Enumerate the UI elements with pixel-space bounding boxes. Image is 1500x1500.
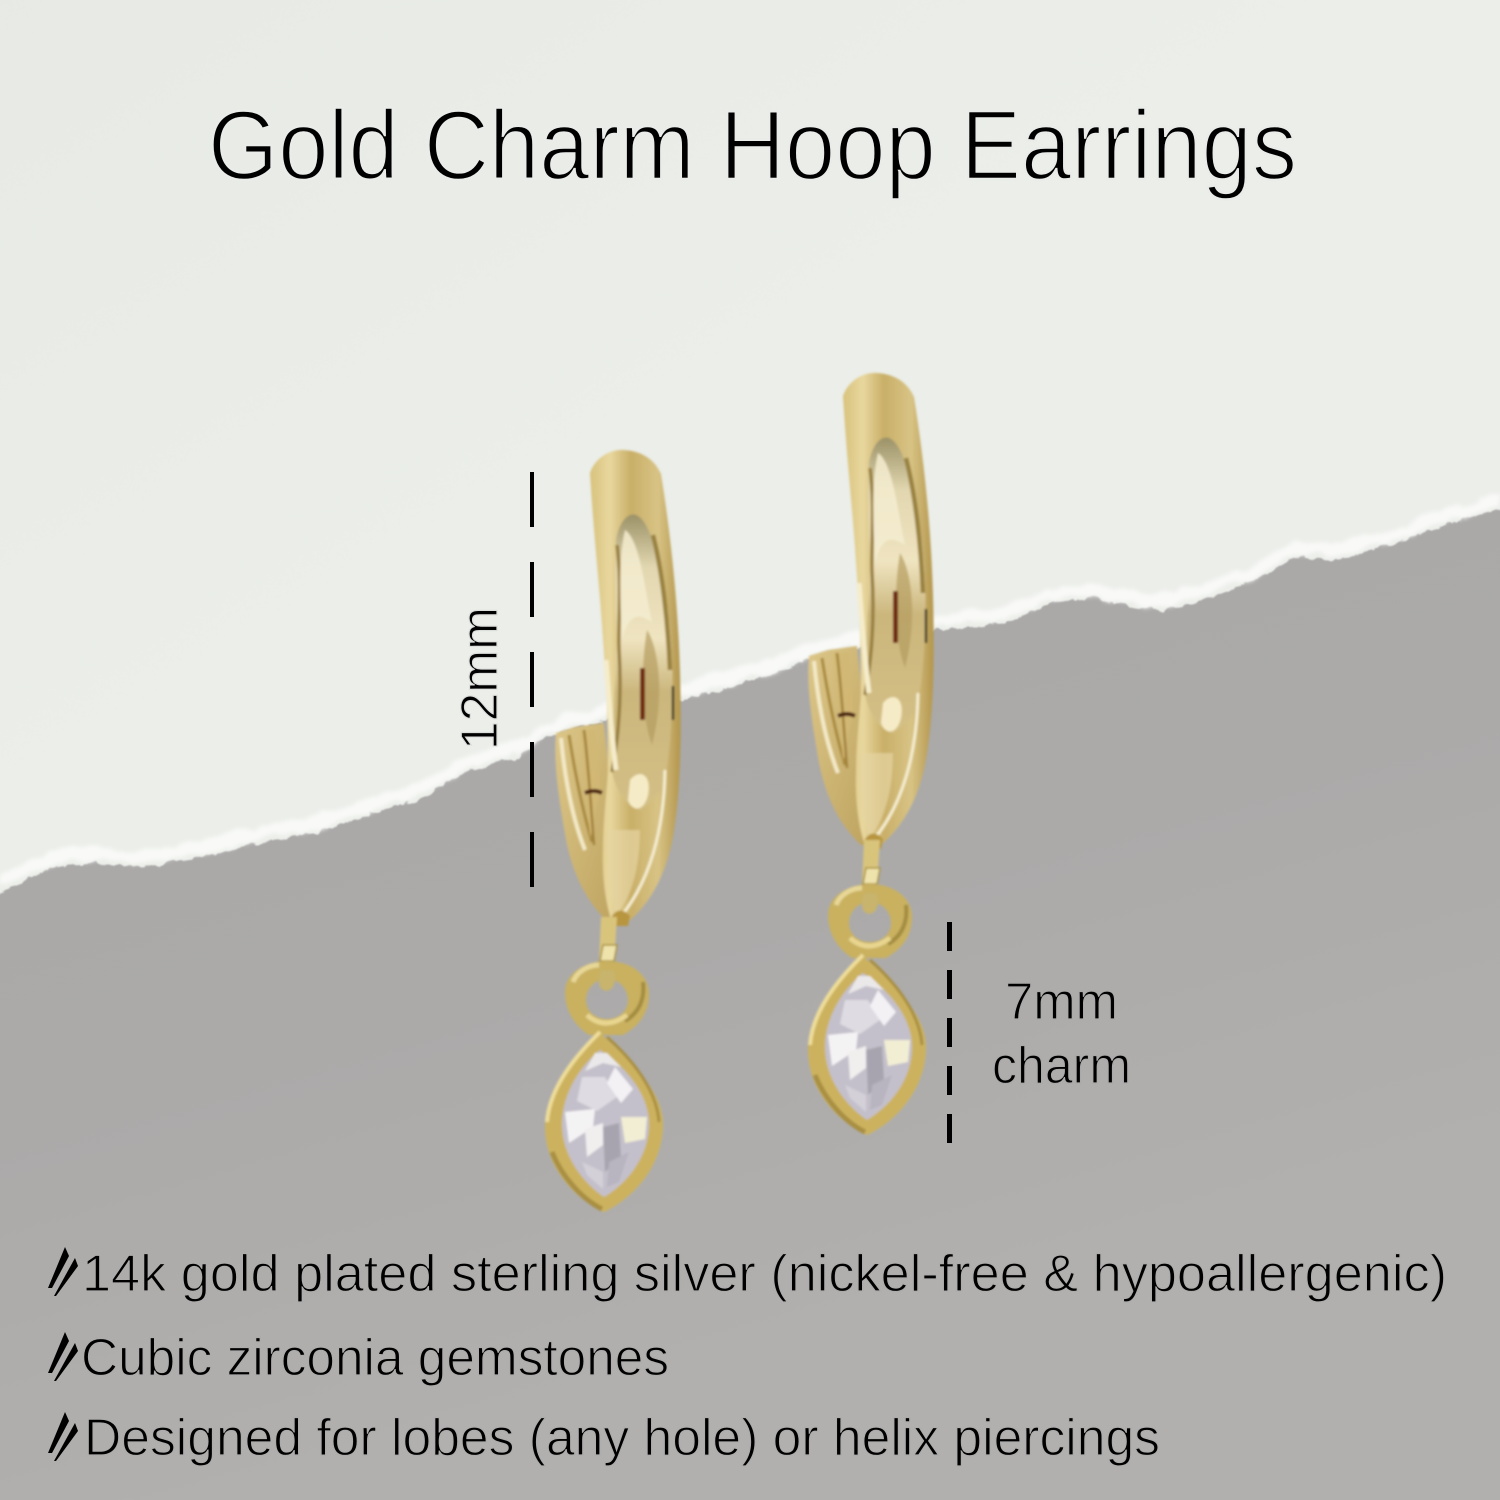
feature: gemstones: Cubic zirconia gemstones [81, 1329, 669, 1387]
icon: right marquise charm [808, 840, 926, 1135]
bullet icon: double slash [48, 1412, 78, 1461]
panel: torn white paper upper background [0, 0, 1500, 900]
bullet icon: double slash [48, 1332, 78, 1381]
label: 12mm: 12mm [451, 607, 509, 750]
icon: left gold hoop [555, 450, 681, 926]
label: 7mm charm: charm [992, 1037, 1131, 1095]
feature list [48, 1245, 1447, 1467]
feature: material: 14k gold plated sterling silver (nickel-free & hypoallergenic) [82, 1245, 1447, 1303]
earring: left hoop with charm [545, 450, 681, 1212]
dashed measure line: 7mm charm height [947, 922, 952, 1143]
icon: left marquise charm [545, 917, 663, 1212]
earring: right hoop with charm [808, 373, 934, 1135]
title: Gold Charm Hoop Earrings [208, 90, 1297, 200]
bullet icon: double slash [48, 1247, 78, 1296]
label: 7mm charm [992, 973, 1131, 1095]
icon: right gold hoop [808, 373, 934, 849]
dashed measure line: 12mm hoop height [530, 472, 534, 887]
feature: piercing use: Designed for lobes (any hole) or helix piercings [84, 1409, 1160, 1467]
label: 7mm charm: 7mm [1005, 973, 1118, 1031]
